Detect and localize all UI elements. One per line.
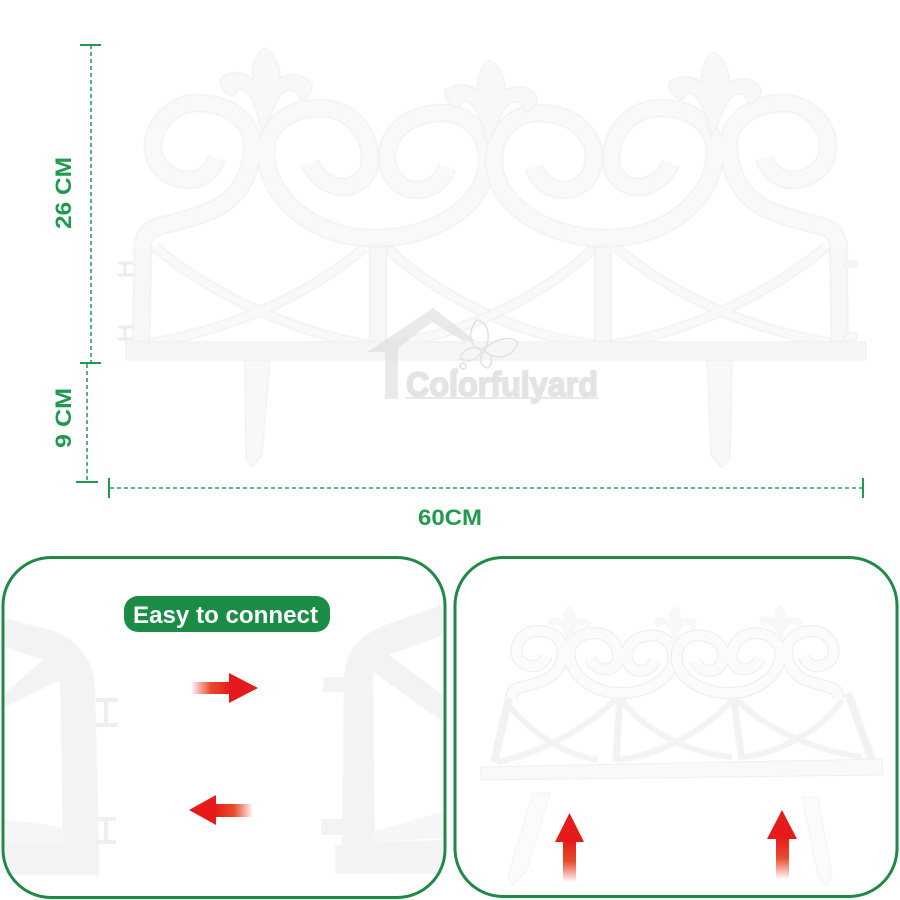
close-up fence ends [5, 605, 443, 875]
fleur-de-lis finials [220, 48, 761, 144]
small fence scrolls [511, 605, 839, 698]
right connector tabs [845, 261, 857, 340]
arrow: pointing left [189, 795, 253, 825]
watermark brand name: Colorfulyard [406, 366, 598, 404]
fence crossed arcs [150, 247, 831, 345]
watermark butterfly [452, 320, 518, 374]
fence posts [141, 238, 840, 345]
arrow: up right [767, 810, 797, 879]
watermark house [367, 308, 476, 399]
left ground stake [245, 360, 270, 467]
right connector tabs [321, 677, 345, 835]
small fence base bar [481, 759, 883, 780]
left loose stake [508, 793, 550, 885]
right ground stake [707, 360, 732, 468]
dimension: height 26 CM [51, 45, 101, 363]
fence scrolls [142, 103, 839, 250]
fence product photo [118, 48, 866, 468]
label 26 CM: 26 CM [51, 157, 76, 229]
panel: stake installation [455, 558, 897, 896]
watermark logo [367, 308, 598, 404]
dimension: stake 9 CM [51, 364, 98, 482]
dimension: width 60CM [109, 478, 863, 530]
label 9 CM: 9 CM [51, 388, 76, 448]
small fence frame [494, 693, 872, 762]
badge: Easy to connect [124, 596, 330, 632]
panel: easy to connect [3, 558, 445, 898]
arrow: pointing right [191, 673, 258, 703]
arrow: up left [555, 813, 584, 882]
left fence end [5, 618, 99, 875]
fence base bar [126, 342, 866, 360]
right loose stake [802, 797, 832, 885]
left connector clips [118, 263, 133, 339]
badge: Easy to connect: Easy to connect [133, 602, 318, 629]
watermark underline [406, 397, 598, 399]
left connector clips [96, 700, 118, 842]
label 60CM: 60CM [418, 505, 482, 530]
right fence end [335, 605, 443, 874]
